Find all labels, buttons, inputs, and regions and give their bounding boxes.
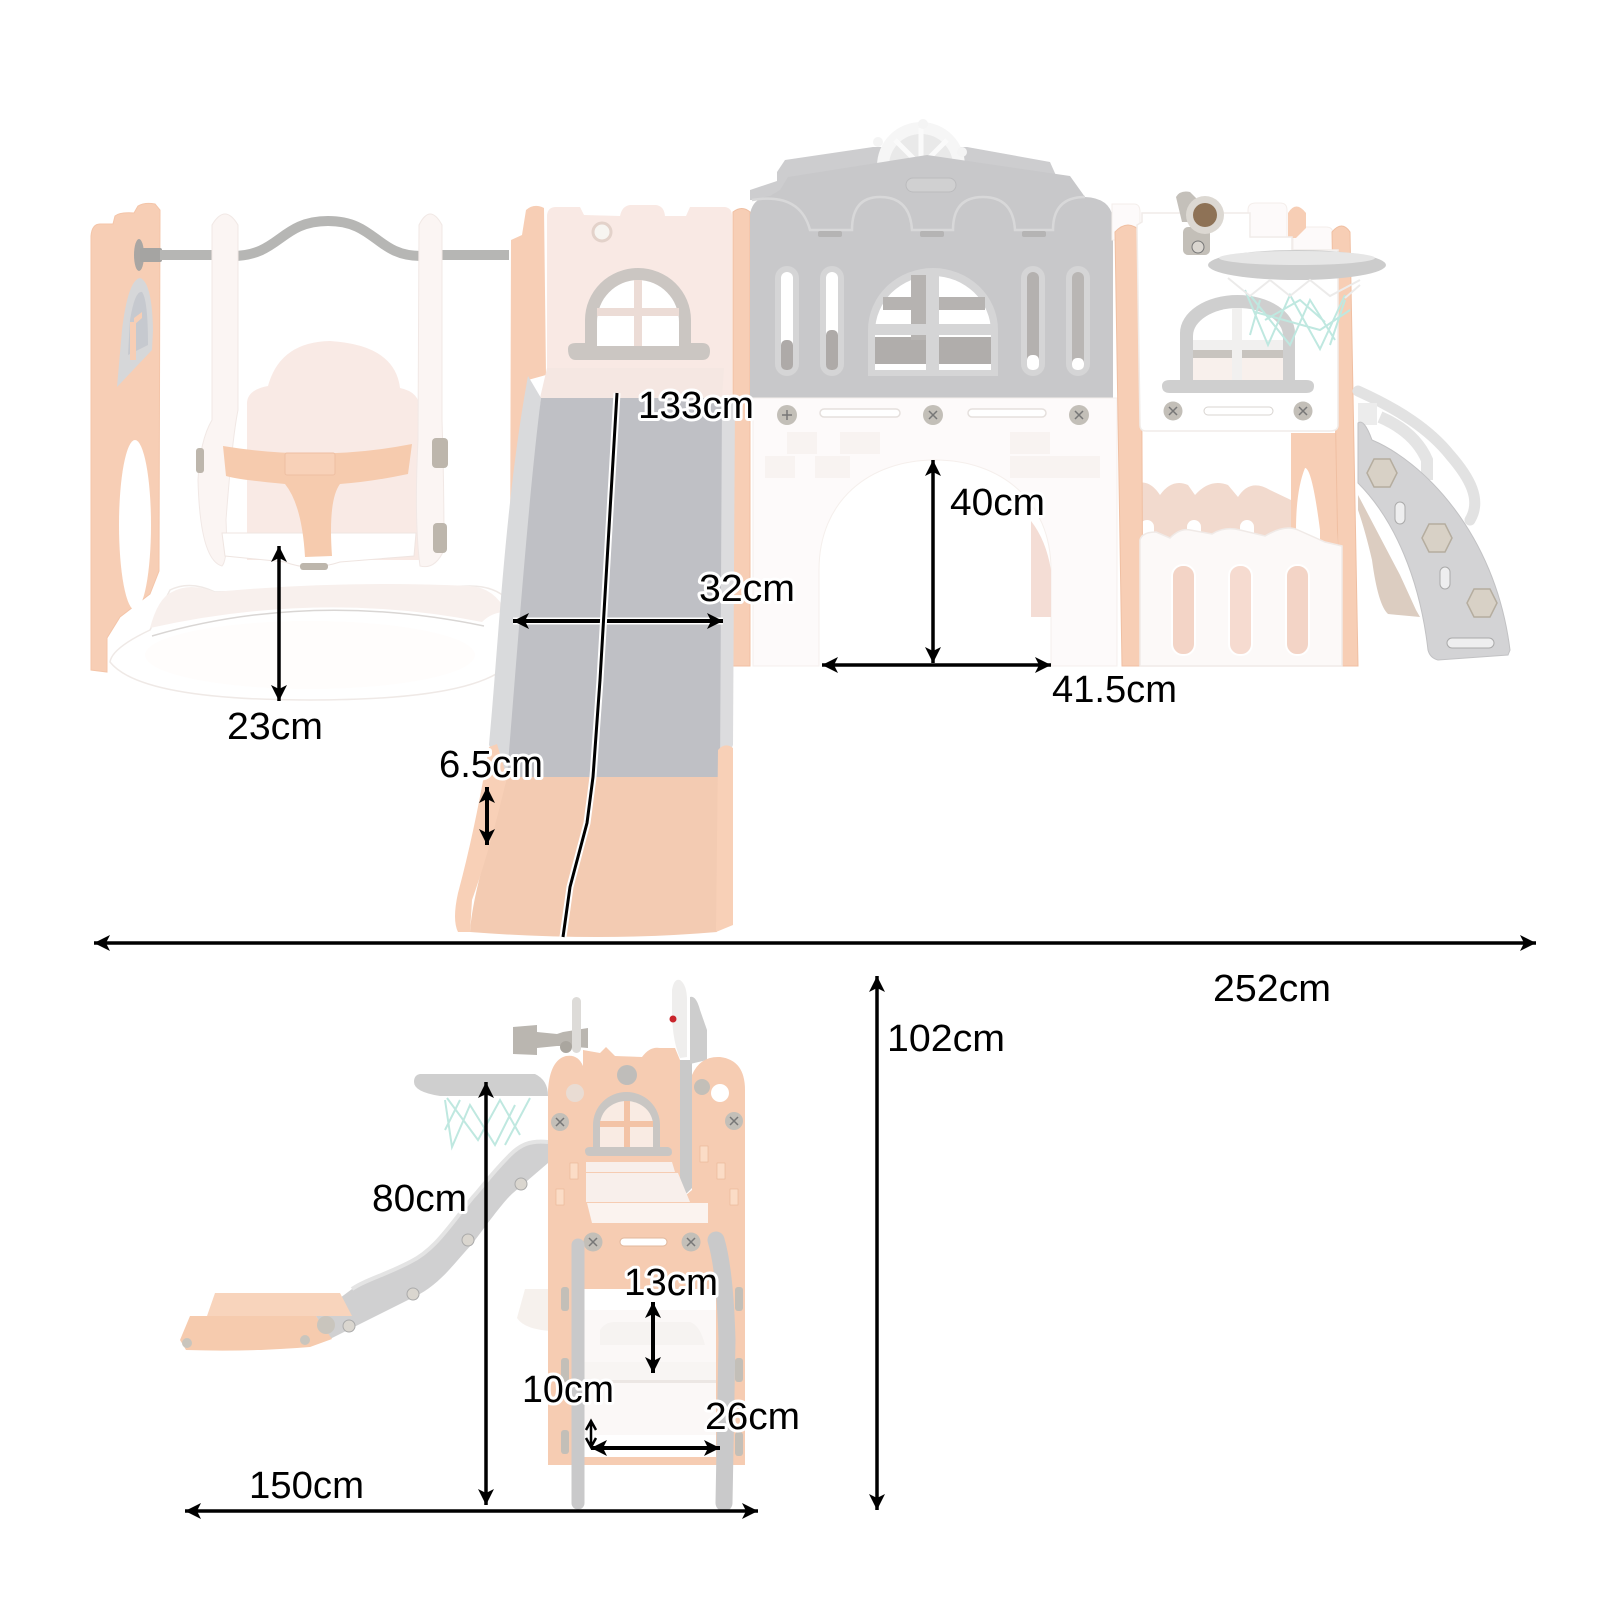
upper white panel <box>1137 213 1338 431</box>
arrow: depth 150cm <box>185 1509 758 1513</box>
wall screws <box>777 405 1089 425</box>
brick emboss <box>765 432 1100 478</box>
arrow: swing height 23cm <box>277 546 281 701</box>
climber inner rail <box>1380 417 1427 480</box>
arrow halo: slide width 32cm <box>513 618 723 624</box>
stairs <box>584 1289 716 1457</box>
slide tower <box>510 205 750 666</box>
side backboard <box>670 980 707 1200</box>
label: 26cm: 26cm <box>705 1396 800 1438</box>
back roof wings <box>750 147 1058 200</box>
label: 40cm: 40cm <box>950 482 1045 524</box>
back fence openings <box>1140 520 1254 570</box>
slide peach run-out <box>470 777 720 937</box>
label: 80cm: 80cm <box>372 1178 467 1220</box>
label: 252cm: 252cm <box>1213 968 1331 1010</box>
side platform steps <box>586 1162 708 1223</box>
climber slots <box>1395 502 1494 648</box>
arrow: step gap 10cm <box>586 1421 596 1447</box>
label: 23cm: 23cm <box>227 706 323 748</box>
slide front foot <box>180 1316 332 1351</box>
label: 6.5cm: 6.5cm <box>439 744 543 786</box>
post window <box>117 278 153 387</box>
rear white slide <box>517 1289 553 1331</box>
slide right rail <box>719 398 735 777</box>
climber handrail <box>1358 391 1475 520</box>
swing safety bar <box>223 444 412 557</box>
post bracket <box>134 239 144 271</box>
stair bolts <box>561 1287 743 1456</box>
basketball hoop <box>1208 250 1386 280</box>
swing seat back <box>247 341 420 560</box>
arrow: step height 13cm <box>651 1302 655 1373</box>
slide left flank <box>455 744 507 932</box>
tower porthole <box>593 223 611 241</box>
arrow: overall height 102cm <box>875 976 879 1510</box>
arrow: overall width 252cm <box>94 941 1536 945</box>
label: 13cm: 13cm <box>624 1262 718 1304</box>
swing bar <box>160 221 509 256</box>
long slide <box>455 368 735 937</box>
wall slots <box>820 409 1046 417</box>
arrow: slide length 133cm <box>563 393 617 937</box>
side hoop net <box>445 1098 530 1147</box>
side tower slot <box>620 1238 667 1246</box>
side telescope <box>513 997 588 1055</box>
lower back post <box>1291 433 1337 666</box>
slide top lip <box>540 368 724 398</box>
swing right arm <box>416 214 444 567</box>
label: 133cm: 133cm <box>638 385 754 427</box>
climber under part <box>1358 495 1420 617</box>
basketball net <box>1245 290 1350 349</box>
side tower screws <box>551 1065 743 1252</box>
side tower window <box>585 1092 672 1156</box>
stair rails <box>578 1240 727 1503</box>
telescope <box>1176 192 1224 255</box>
arrow: slide wall 6.5cm <box>485 787 489 845</box>
tower side post left <box>510 206 546 590</box>
slide right flank <box>716 745 733 932</box>
tower wall <box>547 205 732 400</box>
slide screws <box>343 1178 527 1332</box>
arrow: height 80cm <box>484 1082 488 1505</box>
label: 32cm: 32cm <box>699 568 795 610</box>
arched slots <box>775 266 1090 376</box>
swing seat <box>222 533 416 567</box>
swing base ring <box>110 584 511 700</box>
arrow halo: slide length 133cm <box>563 393 617 937</box>
front peach post <box>1332 226 1358 666</box>
climber rocks <box>1367 459 1497 617</box>
label: 102cm: 102cm <box>887 1018 1005 1060</box>
side view playset <box>180 980 745 1503</box>
slide back foot <box>207 1293 352 1316</box>
grey house <box>750 119 1117 666</box>
front fence <box>1140 528 1342 666</box>
house lower wall with arch <box>753 398 1117 666</box>
back battlements <box>1112 203 1333 260</box>
swing bar plaque <box>285 453 335 475</box>
back fence <box>1138 482 1291 660</box>
measurement arrows <box>94 393 1536 1511</box>
swing set <box>91 203 511 700</box>
climbing wall <box>1358 422 1510 660</box>
slide left rail <box>489 376 541 777</box>
grey front wall <box>750 155 1113 398</box>
tower side post right <box>733 208 750 666</box>
arrow: step width 26cm <box>591 1446 720 1450</box>
crenel slots <box>818 231 1046 237</box>
back peach strip <box>1288 206 1306 238</box>
measurement labels <box>227 385 1331 1507</box>
arrow: slide width 32cm <box>513 619 723 623</box>
roof wheel <box>873 119 967 204</box>
right tower <box>1112 192 1510 666</box>
label: 10cm: 10cm <box>522 1369 614 1411</box>
tower window <box>568 268 710 360</box>
swing bolts <box>196 438 448 570</box>
swing post <box>91 203 162 672</box>
arrow: arch width 41.5cm <box>822 663 1051 667</box>
slide grey bed <box>507 398 722 777</box>
label: 41.5cm: 41.5cm <box>1052 669 1177 711</box>
side tower recesses <box>556 1146 738 1205</box>
arrow halo: step gap 10cm <box>588 1421 594 1446</box>
net white top <box>1228 278 1360 298</box>
label: 150cm: 150cm <box>249 1465 364 1507</box>
panel screws <box>1164 402 1312 420</box>
side slide <box>316 1142 548 1339</box>
panel slot <box>1204 407 1273 415</box>
battlement emboss <box>752 197 1085 230</box>
climber bracket <box>1358 403 1377 425</box>
peach post middle <box>1115 225 1143 666</box>
side tower portholes <box>566 1084 729 1102</box>
upper window <box>1162 295 1314 393</box>
arrow: arch height 40cm <box>931 460 935 663</box>
large arched window <box>868 268 998 376</box>
foot screws <box>182 1316 335 1348</box>
side hoop <box>414 1074 548 1096</box>
back pillar in arch <box>1031 521 1051 617</box>
roof plaque <box>906 178 956 192</box>
swing left arm <box>198 214 238 566</box>
side tower body <box>548 1047 745 1465</box>
